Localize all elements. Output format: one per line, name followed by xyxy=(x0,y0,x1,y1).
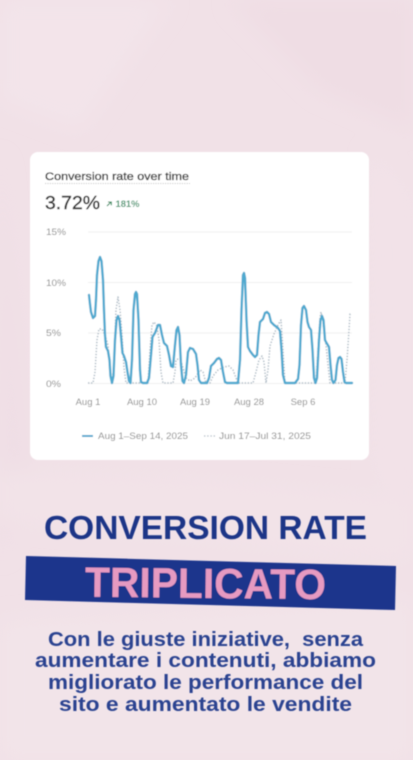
banner text: TRIPLICATO xyxy=(85,560,326,609)
legend: Jun 17–Jul 31, 2025 xyxy=(219,431,311,442)
comparison series: dotted line xyxy=(88,297,351,383)
body text: Con le giuste iniziative, senza xyxy=(48,628,364,651)
body text xyxy=(35,628,376,716)
x axis labels: Aug 1 xyxy=(76,397,100,408)
y axis labels: 0% xyxy=(46,379,62,390)
headline metric: 3.72% xyxy=(45,192,100,213)
legend xyxy=(82,431,311,442)
y axis labels: 5% xyxy=(46,328,62,339)
x axis labels: Aug 19 xyxy=(180,397,210,408)
grid lines xyxy=(88,232,352,384)
body text: aumentare i contenuti, abbiamo xyxy=(35,649,376,672)
line chart xyxy=(46,227,352,442)
x axis labels xyxy=(76,397,315,408)
y axis labels xyxy=(46,227,67,390)
x axis labels: Sep 6 xyxy=(291,397,315,408)
legend: Aug 1–Sep 14, 2025 xyxy=(98,431,188,442)
x axis labels: Aug 28 xyxy=(234,397,264,408)
panel: chart card xyxy=(30,152,369,460)
x axis labels: Aug 10 xyxy=(127,397,157,408)
current series: blue line xyxy=(89,257,352,383)
trend change badge: 181% xyxy=(116,199,140,209)
body text: sito e aumentato le vendite xyxy=(59,693,352,716)
chart title: Conversion rate over time xyxy=(45,171,189,183)
y axis labels: 15% xyxy=(46,227,67,238)
heading: CONVERSION RATE xyxy=(44,510,367,547)
banner xyxy=(25,556,396,610)
body text: migliorato le performance del xyxy=(48,671,363,694)
y axis labels: 10% xyxy=(46,278,67,289)
